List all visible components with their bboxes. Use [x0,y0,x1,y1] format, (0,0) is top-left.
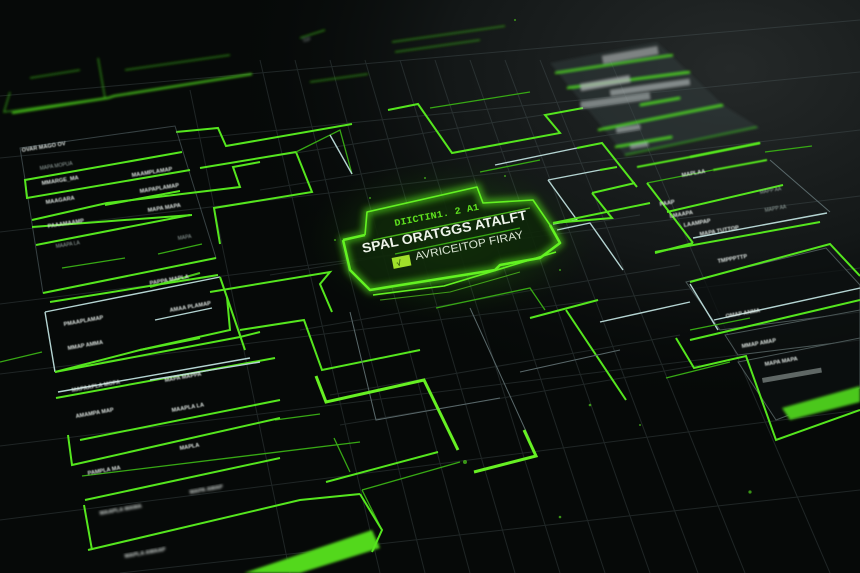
panel: top left faded boxes [4,26,505,113]
card: left lower stack: MAAPLA MAMA [99,504,142,517]
card: left upper list: MAPAPLAMAP [139,183,180,195]
badge icon: √ [396,258,403,268]
panel: right data cards: LMAAPA [669,210,694,220]
card: left upper list: MAPA MAPA [147,203,181,214]
card: left upper list [20,126,260,293]
card: left highlighted: PAPPA MAPLA [149,274,189,287]
badge glow [343,187,560,290]
panel: upper right data cards [550,42,760,155]
card: left lower stack: MAPA AMAP [189,484,224,496]
panel: lower right cards: OMAP ANMA [725,308,761,320]
panel: left stacked data cards [20,126,382,573]
card: left upper list: MAAGARA [45,195,75,206]
card: left lower stack: MAPAAPLA MOPA [71,380,121,394]
panel: right data cards: MAPP AA [764,204,788,214]
panel: right data cards: MAPA TUTTOP [699,225,740,238]
card: left lower stack: PAMPLA MA [87,465,121,477]
background glow behind central badge [300,155,600,325]
badge plate [343,187,560,290]
card: left lower stack: MAAPLA LA [171,402,205,414]
card: left upper list: MAAPA LA [55,240,81,250]
panel: right data cards: MAPP AA [759,186,783,196]
panel: top left faded boxes: SIP [302,37,312,44]
card: left highlighted: MMAP AMMA [67,340,104,352]
card: left upper list: MAAMPLAMAP [131,167,173,179]
card: left lower stack: MAPLA [179,443,200,452]
card: left upper list: OVAR MAGO OV [21,141,66,154]
scattered particles [334,19,752,518]
connector traces: central upper network [176,92,690,440]
panel: lower right cards: TMPPPTTP [717,254,748,265]
badge subtitle: AVRICEITOP FIRAY [414,229,525,263]
badge eyebrow text: DIICTIN1. 2 A1 [393,202,480,229]
card: left upper list: MAPA MOPUA [39,161,74,172]
panel: right data cards [637,143,830,253]
card: left lower stack: MAPA MAPPA [164,372,202,384]
card: left upper list: PAAAMAAMP [47,218,85,230]
panel: right data cards: PAAP [659,199,676,208]
card: left highlighted: PMAAPLAMAP [63,315,104,328]
badge title: SPAL ORATGGS ATALFT [361,207,529,256]
card: left highlighted: AMAA PLAMAP [169,301,212,314]
panel: right data cards: LAAMPAP [683,218,711,229]
card: left lower stack: MAPLA AMAAP [124,547,167,560]
panel: lower right cards [655,222,860,440]
card: left upper list: MMARGE_MA [41,175,79,187]
badge outlines [343,187,560,300]
panel: lower right cards: MMAP AMAP [741,338,777,350]
panel: lower right cards: MAPA MAPA [764,356,798,368]
card: left highlighted [45,273,260,380]
panel: right data cards: MAPLAA [681,169,706,179]
connector traces: lower center [0,352,536,530]
card: left lower stack: AMAMPA MAP [75,407,115,420]
card: left upper list: MAPA [177,234,193,242]
badge icon [392,255,411,269]
card: left lower stack [58,358,382,573]
central badge [343,187,560,300]
